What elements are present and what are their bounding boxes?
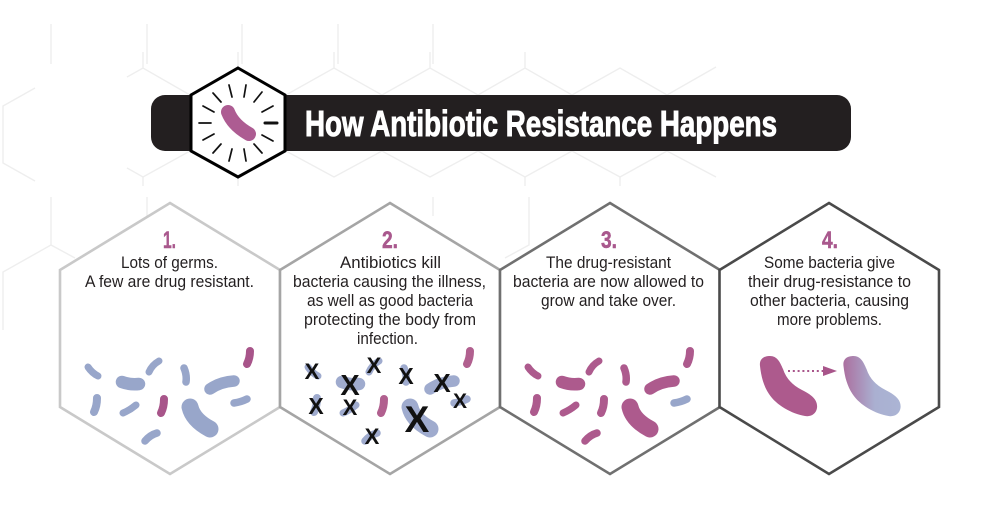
header banner — [151, 68, 851, 177]
text block: step 2: infection. — [357, 330, 418, 348]
text block: step 3: The drug-resistant — [546, 254, 671, 272]
x marks: X — [305, 359, 320, 384]
text block: step 3: grow and take over. — [541, 292, 676, 310]
panel: step 4 — [720, 203, 939, 474]
bacteria group: mostly magenta — [528, 351, 690, 441]
step number 1: 1. — [163, 227, 176, 254]
panel: step 2 — [280, 203, 500, 474]
text block: step 4: other bacteria, causing — [750, 292, 909, 310]
title: How Antibiotic Resistance Happens — [305, 103, 777, 144]
x marks: X — [308, 393, 324, 419]
x marks: X — [433, 368, 451, 398]
step number 3: 3. — [601, 227, 617, 254]
x marks: X — [405, 399, 430, 440]
text block: step 3: bacteria are now allowed to — [513, 273, 704, 291]
bacteria group: killed — [308, 351, 470, 441]
step number 4: 4. — [822, 227, 838, 254]
x marks: X — [367, 353, 382, 378]
x marks: X — [453, 390, 467, 413]
text block: step 4: their drug-resistance to — [748, 273, 911, 291]
panel: step 3 — [500, 203, 720, 474]
text block: step 1: Lots of germs. — [121, 254, 218, 272]
text block: step 1 — [85, 254, 254, 291]
header hexagon icon — [191, 68, 285, 177]
text block: step 2: protecting the body from — [304, 311, 476, 329]
x marks — [305, 353, 467, 449]
text block: step 2 — [293, 254, 486, 348]
x marks: X — [365, 424, 380, 449]
icon: receiving bacterium — [843, 356, 901, 416]
icon: resistant bacterium — [760, 356, 817, 416]
text block: step 3 — [513, 254, 704, 310]
title bar — [151, 95, 851, 151]
panel: step 1 — [60, 203, 280, 474]
text block: step 4 — [748, 254, 911, 329]
x marks: X — [343, 395, 358, 420]
text block: step 2: Antibiotics kill — [340, 254, 441, 272]
text block: step 4: more problems. — [777, 311, 882, 329]
text block: step 1: A few are drug resistant. — [85, 273, 254, 291]
text block: step 2: bacteria causing the illness, — [293, 273, 486, 291]
arrow: transfer — [788, 366, 837, 376]
x marks: X — [398, 363, 414, 389]
step number 2: 2. — [382, 227, 398, 254]
text block: step 2: as well as good bacteria — [307, 292, 474, 310]
text block: step 4: Some bacteria give — [764, 254, 895, 272]
bacteria group: mostly blue — [88, 351, 250, 441]
x marks: X — [340, 370, 360, 402]
